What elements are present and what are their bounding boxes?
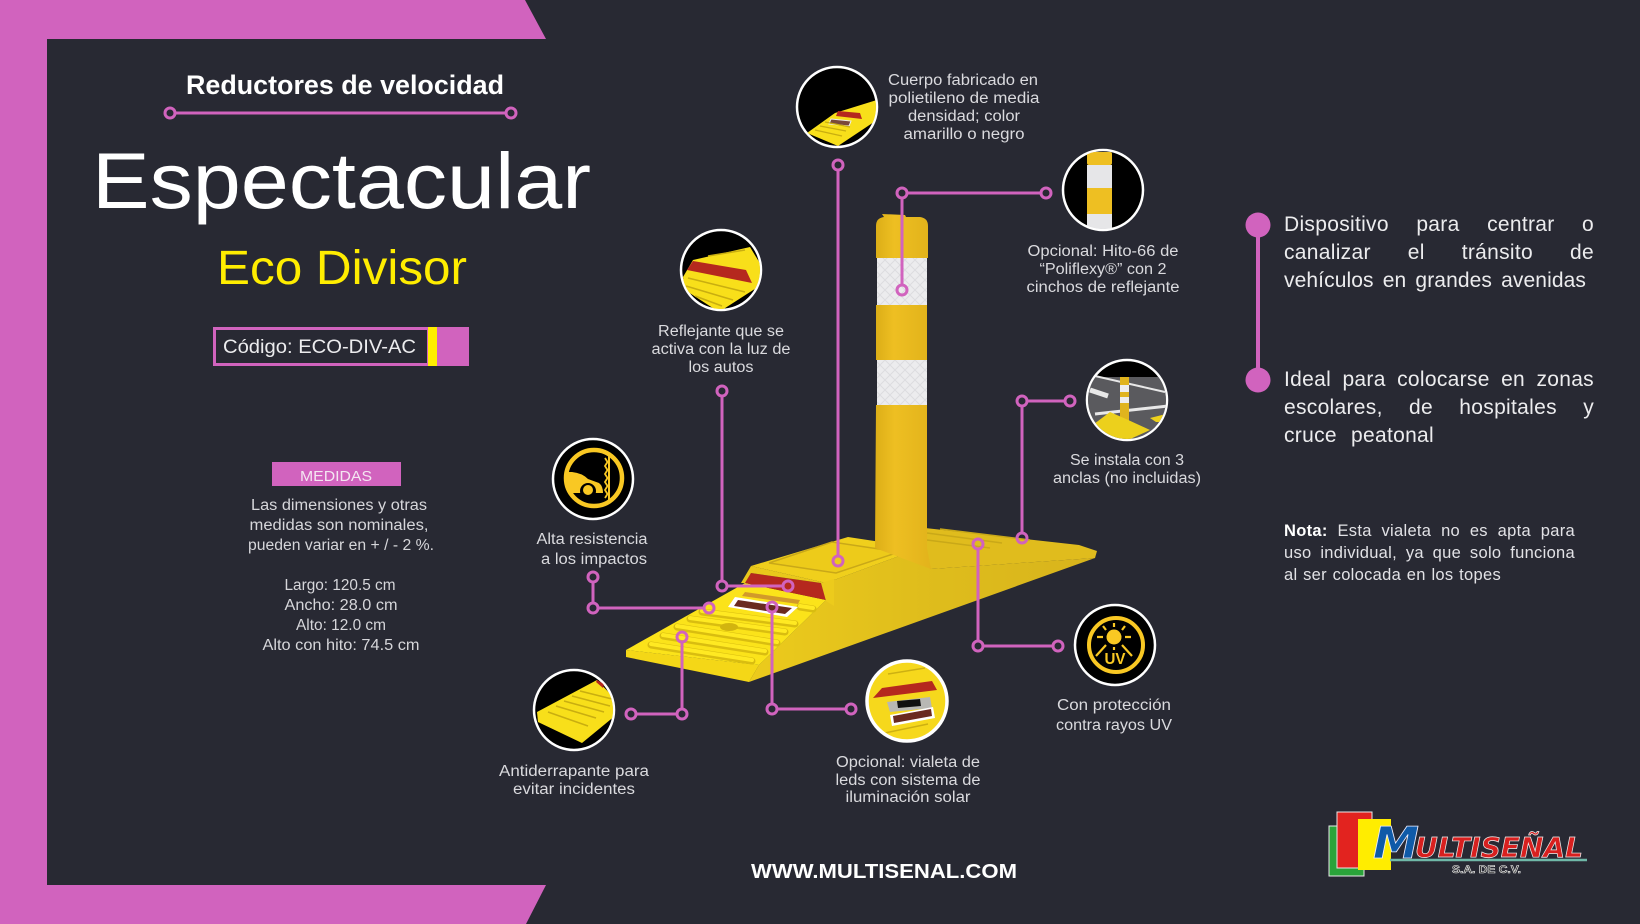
caption: iluminación solar: [846, 789, 970, 806]
logo: Multiseñal: [1329, 812, 1587, 876]
subtitle: Eco Divisor: Eco Divisor: [217, 242, 467, 295]
caption: Alta resistencia: [536, 531, 648, 548]
title block: [92, 70, 591, 366]
connector: reflejante: [717, 386, 793, 591]
caption: contra rayos UV: [1056, 717, 1173, 734]
icon: car against barrier: [553, 439, 633, 519]
icon: divisor body: [797, 67, 880, 147]
front lip: [626, 650, 759, 682]
caption: los autos: [688, 359, 754, 376]
caption: densidad; color: [908, 108, 1020, 125]
connector: anclas: [1017, 396, 1075, 543]
caption: a los impactos: [541, 551, 647, 568]
caption: Opcional: vialeta de: [836, 754, 980, 771]
logo: Multiseñal: S.A. DE C.V.: [1452, 864, 1521, 876]
callout: vialeta: [836, 661, 980, 806]
icon: grip ridges closeup: [534, 670, 616, 750]
caption: cinchos de reflejante: [1026, 279, 1180, 296]
caption: [499, 763, 649, 798]
caption: “Poliflexy®” con 2: [1040, 261, 1166, 278]
medidas values: [262, 577, 420, 654]
connector: hito: [897, 188, 1051, 295]
connector: vialeta: [767, 602, 856, 714]
ramp grip ridges: [651, 606, 813, 661]
text: dispositivo: [1284, 213, 1594, 292]
callout: cuerpo: [797, 67, 1040, 147]
panel: medidas: [248, 462, 434, 654]
connector: antiderrapante: [626, 632, 687, 719]
heading rule with end dots: [165, 108, 516, 118]
caption: evitar incidentes: [513, 781, 635, 798]
title: Espectacular: Espectacular: [92, 136, 591, 225]
caption: activa con la luz de: [652, 341, 790, 358]
caption: Opcional: Hito-66 de: [1028, 243, 1178, 260]
red reflector: [745, 573, 826, 600]
caption: anclas (no incluidas): [1053, 470, 1201, 487]
heading: Reductores de velocidad: Reductores de velocidad: [186, 70, 504, 100]
text: dispositivo: Dispositivo para centrar o: [1284, 213, 1594, 236]
icon: red reflector closeup: [681, 230, 764, 312]
caption: [1026, 243, 1180, 296]
text: ideal para colocarse: escolares, de hospitales y: [1284, 396, 1594, 419]
caption: Antiderrapante para: [499, 763, 649, 780]
connector: cuerpo: [833, 160, 843, 566]
medidas note: pueden variar en + / - 2 %.: [248, 537, 434, 554]
medidas label: [272, 462, 401, 486]
logo: Multiseñal: M: [1373, 818, 1419, 869]
text: nota: al ser colocada en los topes: [1284, 566, 1501, 584]
post: [875, 214, 931, 569]
anchor hole: [720, 623, 738, 631]
medidas label: MEDIDAS: [300, 468, 372, 485]
text: nota: [1284, 522, 1575, 584]
medidas note: medidas son nominales,: [250, 517, 428, 534]
product code box: Código: ECO-DIV-AC: [223, 336, 416, 358]
callout: impactos: [536, 439, 648, 568]
block top: [751, 537, 921, 583]
medidas note: Las dimensiones y otras: [251, 497, 427, 514]
website: WWW.MULTISENAL.COM: [751, 861, 1017, 883]
caption: Se instala con 3: [1070, 452, 1184, 469]
icon: installed divisor photo: [1085, 360, 1169, 442]
caption: [836, 754, 980, 806]
text: nota: Nota: Esta vialeta no es apta para: [1284, 522, 1575, 540]
caption: Reflejante que se: [658, 323, 784, 340]
caption: polietileno de media: [888, 90, 1040, 107]
side face: [749, 548, 1095, 682]
icon: solar led stud closeup: [867, 661, 947, 741]
callout: rayos UV: [1056, 605, 1173, 734]
callout: antiderrapante: [499, 670, 649, 798]
text: ideal para colocarse: [1284, 368, 1594, 447]
caption: Cuerpo fabricado en: [888, 72, 1038, 89]
icon: UV sun: UV: [1104, 651, 1126, 668]
callout: anclas: [1053, 360, 1201, 487]
caption: [1056, 697, 1173, 734]
medidas values: Alto con hito: 74.5 cm: [262, 637, 420, 654]
ramp surface: [626, 583, 826, 665]
medidas values: Alto: 12.0 cm: [296, 617, 386, 634]
medidas values: Ancho: 28.0 cm: [284, 597, 398, 614]
medidas values: Largo: 120.5 cm: [284, 577, 396, 594]
product code box: [214, 327, 469, 366]
caption: leds con sistema de: [836, 772, 980, 789]
connector: rayos UV: [973, 539, 1063, 651]
timeline connector: [1246, 212, 1270, 392]
icon: post with reflective bands: [1063, 150, 1143, 232]
caption: Con protección: [1057, 697, 1171, 714]
connector: impactos: [588, 572, 714, 613]
caption: [652, 323, 790, 376]
product: eco divisor with post: [626, 214, 1097, 682]
text: nota: uso individual, ya que solo funciona: [1284, 544, 1575, 562]
frame: pink corner band: [0, 0, 546, 924]
caption: [536, 531, 648, 568]
caption: [888, 72, 1040, 143]
caption: amarillo o negro: [904, 126, 1024, 143]
rear section top: [925, 528, 1097, 569]
text: ideal para colocarse: cruce peatonal: [1284, 424, 1434, 447]
callout: reflejante: [652, 230, 790, 376]
text: dispositivo: vehículos en grandes avenidas: [1284, 269, 1586, 292]
logo: Multiseñal: ULTISEÑAL: [1415, 830, 1583, 864]
text: dispositivo: canalizar el tránsito de: [1284, 241, 1594, 264]
medidas note: [248, 497, 434, 554]
text: ideal para colocarse: Ideal para colocarse en zonas: [1284, 368, 1594, 391]
solar stud: [728, 592, 800, 617]
caption: [1053, 452, 1201, 487]
callout: hito: [1026, 150, 1180, 296]
